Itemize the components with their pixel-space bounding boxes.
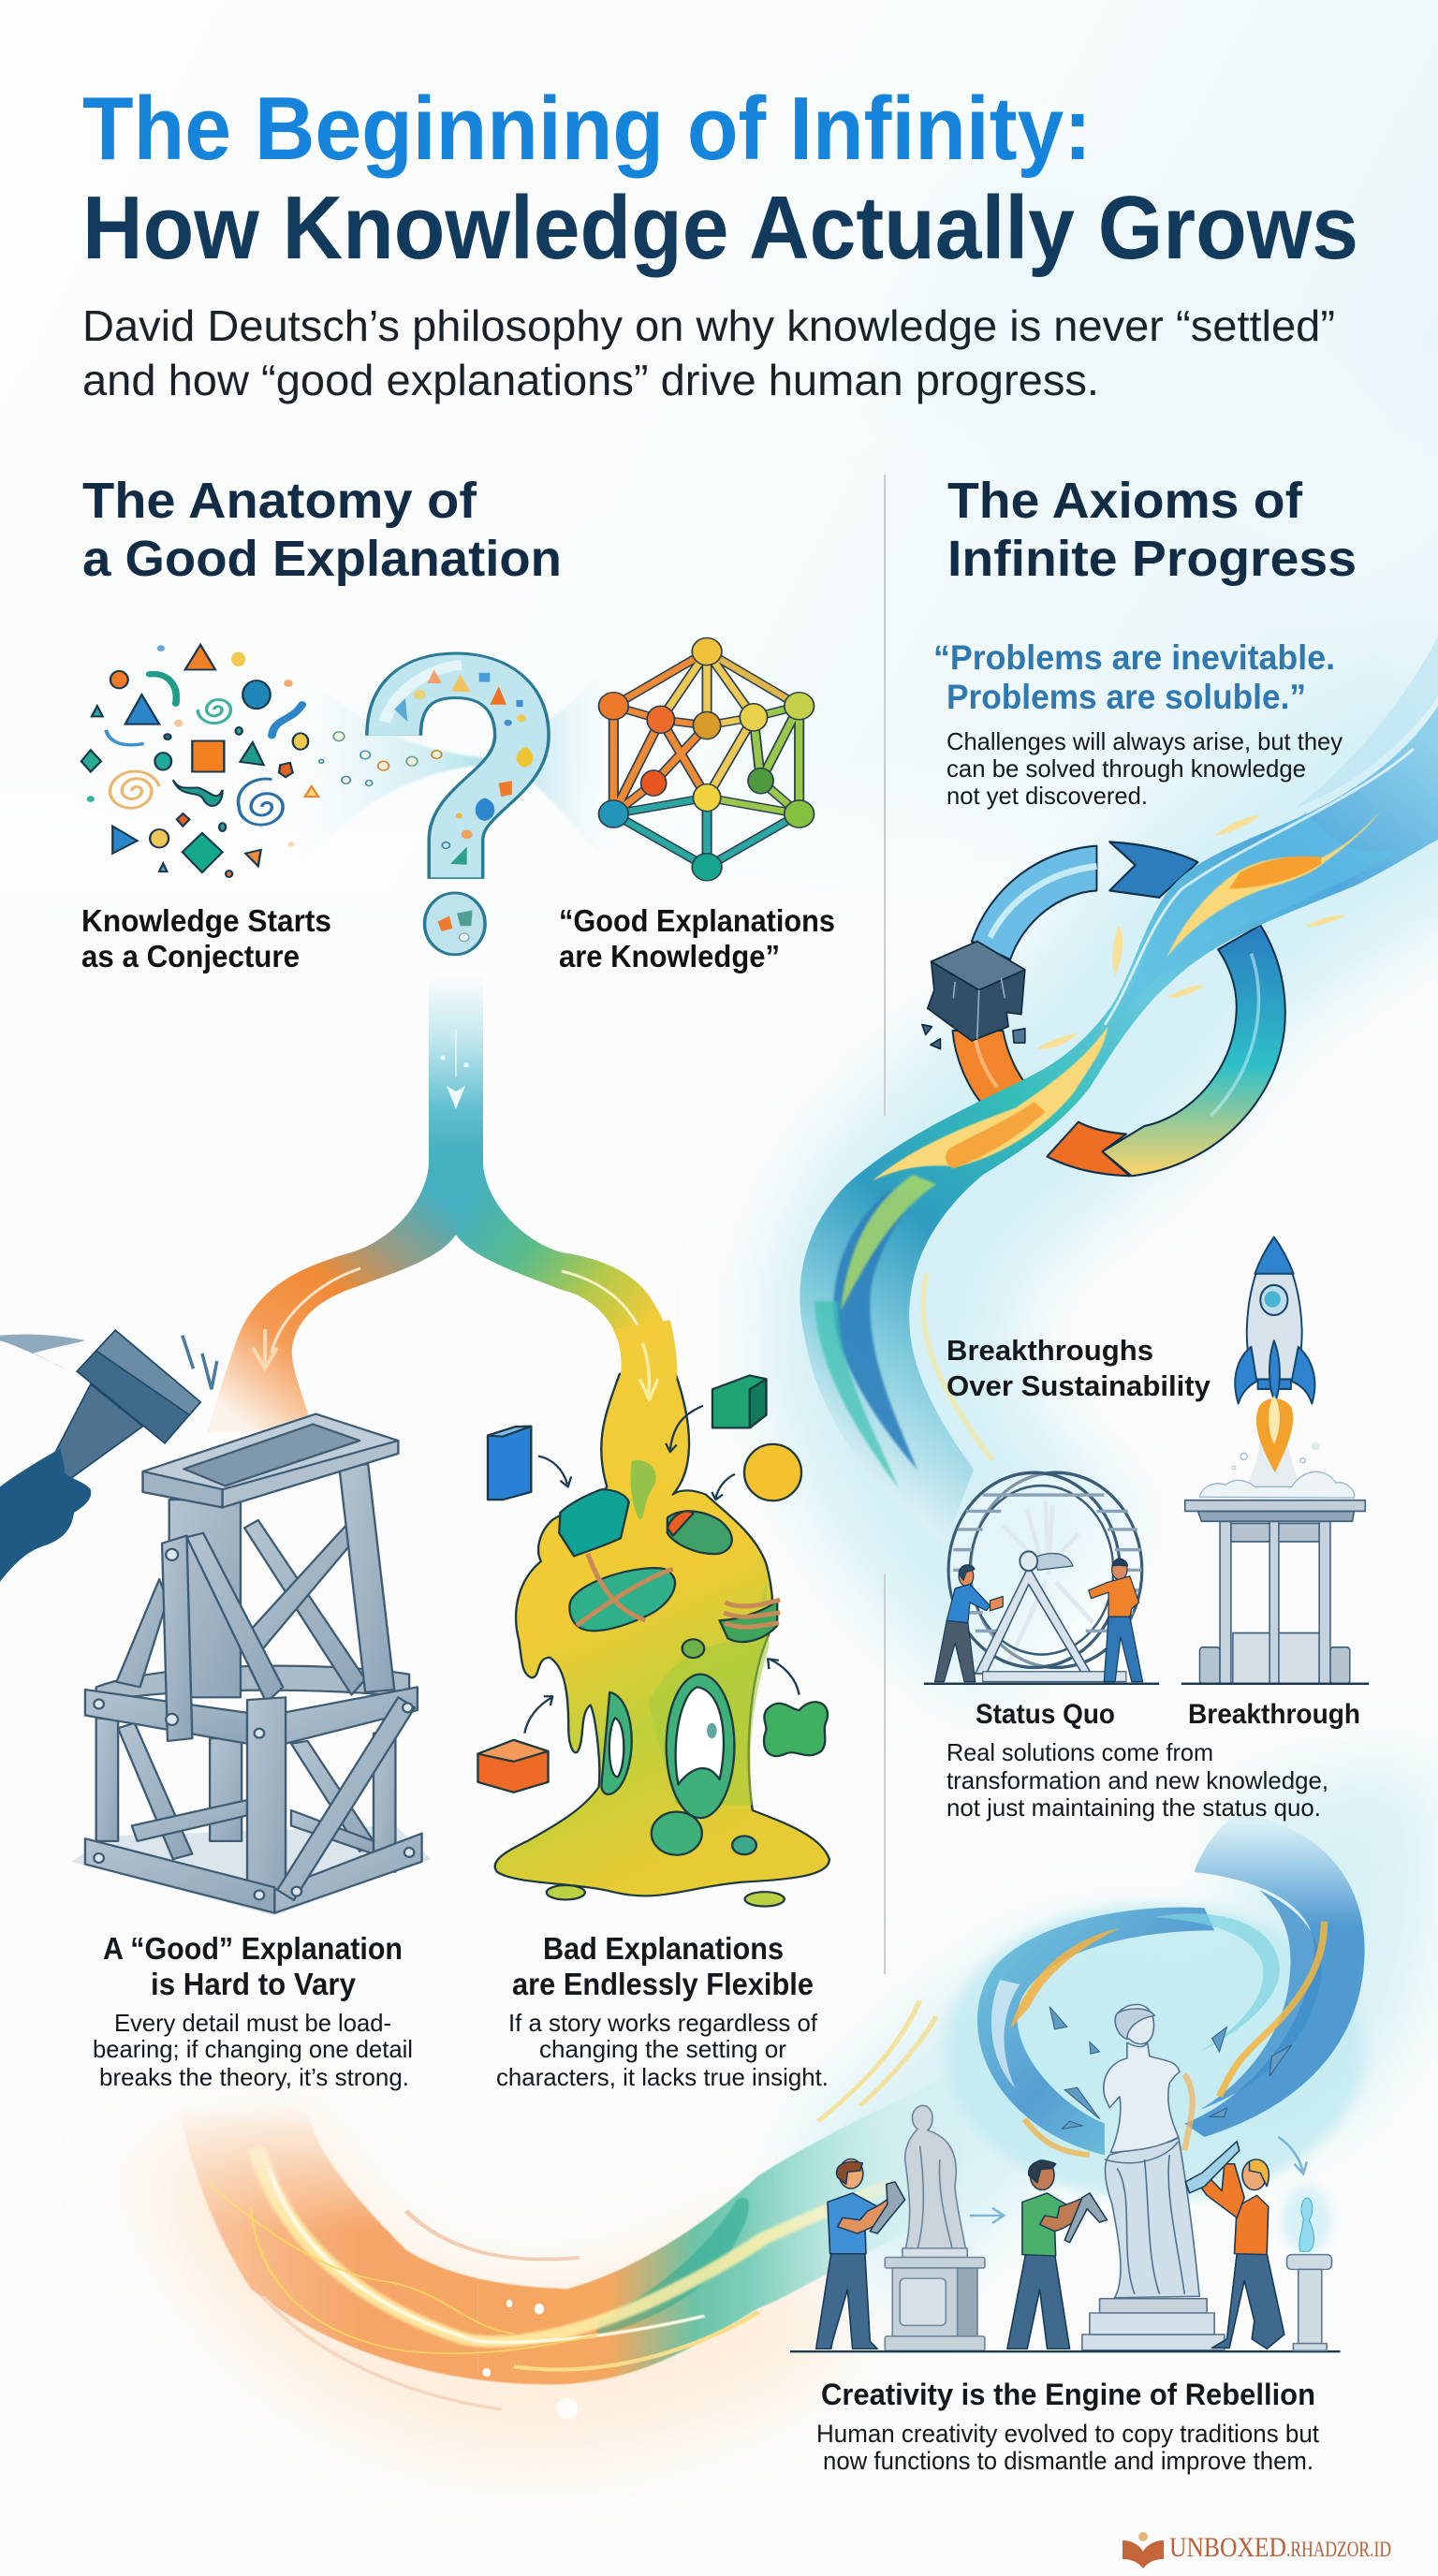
icon: energy swirl around statue	[945, 1814, 1365, 2200]
text block: bad explanations flexible: Bad Explanations	[543, 1931, 784, 1966]
title: The Beginning of Infinity:	[82, 79, 1092, 179]
text block: good explanation hard to vary: Every detail must be load-	[114, 2009, 391, 2037]
flowing ribbon: problem-solving stream	[800, 637, 1438, 1544]
background haze around flowing ribbons	[225, 281, 1438, 2371]
panel: left column illustrations	[0, 638, 829, 1915]
subtitle: David Deutsch’s philosophy on why knowledge is never “settled”	[82, 301, 1335, 350]
text block: bad explanations flexible	[496, 1931, 829, 2091]
label: breakthroughs over sustainability: Breakthroughs	[946, 1334, 1153, 1367]
label: knowledge starts as a conjecture: Knowledge Starts	[81, 903, 331, 938]
text block: bad explanations flexible: characters, it lacks true insight.	[496, 2063, 829, 2091]
heading: axioms of infinite progress: Infinite Progress	[947, 531, 1357, 587]
text block: good explanation hard to vary: A “Good” Explanation	[103, 1931, 403, 1966]
quote: problems are inevitable and soluble	[933, 638, 1335, 716]
label: knowledge starts as a conjecture: as a Conjecture	[81, 939, 300, 973]
icon: rocket	[1235, 1237, 1314, 1404]
icon: small classical statue on pedestal	[885, 2105, 985, 2350]
icon: launch pedestal	[1181, 1500, 1369, 1684]
heading: anatomy of a good explanation	[82, 473, 562, 587]
watermark logo: .RHADZOR.ID	[1286, 2538, 1391, 2561]
icon: status quo wheel with two people	[924, 1472, 1159, 1684]
icon: large Venus statue on steps	[1082, 2004, 1225, 2350]
column divider	[884, 475, 886, 1974]
subtitle	[82, 301, 1335, 404]
text block: challenges: Challenges will always arise, but they	[946, 727, 1343, 755]
arrows between sculptors	[970, 2137, 1307, 2223]
label: breakthrough: Breakthrough	[1188, 1699, 1360, 1730]
watermark logo: UNBOXED	[1169, 2532, 1286, 2563]
text block: challenges	[946, 727, 1343, 810]
quote: problems are inevitable and soluble: “Problems are inevitable.	[933, 638, 1335, 677]
label: breakthroughs over sustainability	[946, 1334, 1211, 1402]
icon: hammer and hand	[0, 1330, 217, 1582]
text block: good explanation hard to vary: is Hard to Vary	[151, 1967, 357, 2001]
text block: bad explanations flexible: changing the setting or	[539, 2035, 786, 2063]
text block: good explanation hard to vary: bearing; if changing one detail	[93, 2035, 413, 2063]
heading: axioms of infinite progress	[947, 473, 1357, 587]
quote: problems are inevitable and soluble: Problems are soluble.”	[946, 678, 1306, 716]
label: breakthroughs over sustainability: Over Sustainability	[946, 1369, 1211, 1402]
label: status quo: Status Quo	[976, 1699, 1115, 1730]
arrow: flow stem splitting into two branches	[208, 976, 676, 1432]
funnel glow into question mark	[291, 663, 609, 871]
icon: three sculptors with tools	[790, 2142, 1341, 2351]
label: knowledge starts as a conjecture	[81, 903, 331, 973]
heading: axioms of infinite progress: The Axioms of	[947, 473, 1303, 529]
text block: creativity is the engine of rebellion: now functions to dismantle and improve them.	[823, 2447, 1313, 2475]
label: good explanations are knowledge: “Good Explanations	[559, 903, 835, 938]
text block: good explanation hard to vary	[93, 1931, 413, 2091]
panel: right column illustrations	[790, 637, 1438, 2351]
bottom swoosh: creativity stream	[179, 2000, 1015, 2420]
icon: person pushing wheel, right	[1089, 1559, 1143, 1682]
icon: rocket flame and launch smoke	[1199, 1396, 1355, 1498]
heading: anatomy of a good explanation: a Good Explanation	[82, 531, 562, 587]
text block: challenges: not yet discovered.	[946, 782, 1148, 810]
text block: bad explanations flexible: are Endlessly Flexible	[512, 1967, 814, 2001]
text block: real solutions: Real solutions come from	[946, 1738, 1213, 1766]
icon: problem-solving cycle ring	[952, 842, 1285, 1176]
icon: scattered conjecture shapes	[81, 645, 442, 877]
text block: bad explanations flexible: If a story works regardless of	[508, 2009, 818, 2037]
icon: cracked problem block	[922, 942, 1025, 1049]
text block: good explanation hard to vary: breaks the theory, it’s strong.	[99, 2063, 409, 2091]
subtitle: and how “good explanations” drive human progress.	[82, 356, 1099, 404]
text block: creativity is the engine of rebellion: Creativity is the Engine of Rebellion	[821, 2378, 1315, 2411]
text block: creativity is the engine of rebellion	[816, 2378, 1319, 2475]
icon: person pushing wheel, left	[935, 1565, 1003, 1682]
text block: real solutions	[946, 1738, 1328, 1822]
icon: glass question mark	[385, 666, 533, 879]
title: How Knowledge Actually Grows	[82, 178, 1358, 278]
icon: column with glowing new form	[1282, 2187, 1331, 2350]
icon: hard-to-vary steel tower	[71, 1414, 432, 1915]
watermark logo	[1123, 2532, 1391, 2569]
icon: question mark dot	[425, 893, 485, 955]
icon: good explanation network	[599, 638, 814, 881]
text block: real solutions: transformation and new knowledge,	[946, 1766, 1328, 1794]
icon: flexible slime blob with blocks	[477, 1320, 829, 1907]
label: good explanations are knowledge	[559, 903, 835, 973]
heading: anatomy of a good explanation: The Anatomy of	[82, 473, 477, 529]
text block: challenges: can be solved through knowledge	[946, 754, 1306, 783]
title	[82, 79, 1358, 278]
label: good explanations are knowledge: are Knowledge”	[559, 939, 780, 973]
text block: real solutions: not just maintaining the status quo.	[946, 1793, 1321, 1822]
text block: creativity is the engine of rebellion: Human creativity evolved to copy traditions but	[816, 2420, 1319, 2448]
